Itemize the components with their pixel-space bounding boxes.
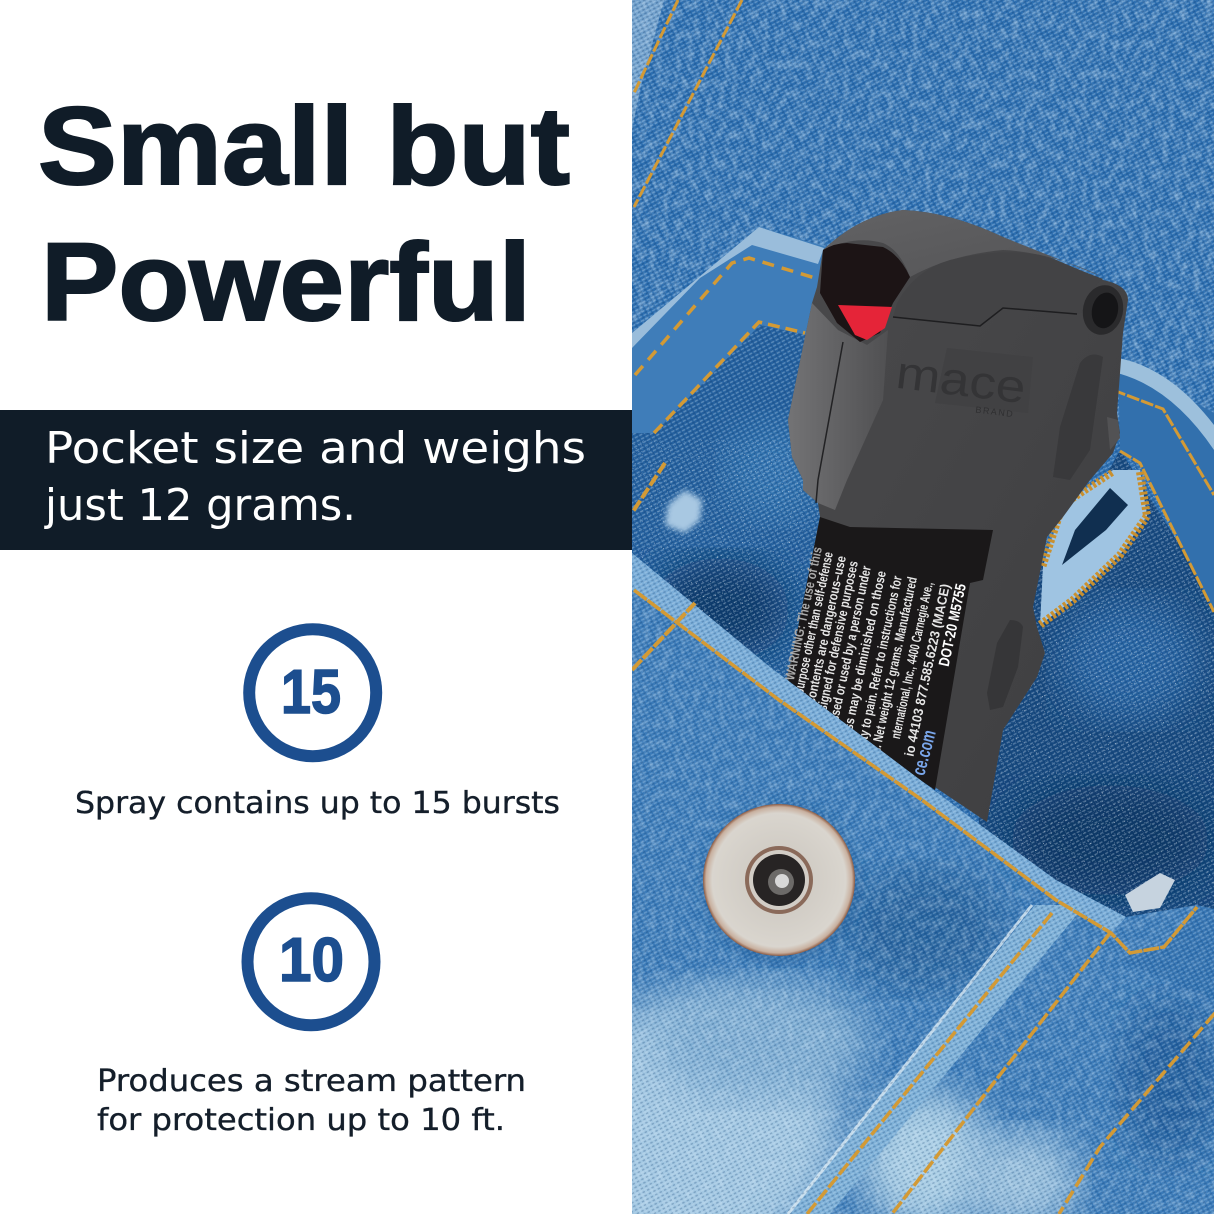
text: bursts: Spray contains up to 15 bursts	[75, 786, 560, 821]
heading: Powerful	[41, 221, 531, 344]
canister	[787, 517, 993, 790]
belt loop tear	[1040, 470, 1147, 625]
right waistband	[1113, 358, 1214, 612]
heading	[38, 85, 570, 344]
device body	[787, 210, 1128, 822]
brand panel	[935, 348, 1033, 413]
canister warning text: ivity to pain. Refer to instructions for	[853, 574, 905, 752]
banner: pocket size	[0, 410, 632, 550]
left seam stitch	[632, 463, 665, 513]
coin pocket flap	[632, 227, 830, 433]
canister warning text: WARNING: The use of this	[782, 546, 825, 682]
canister warning text: ness may be diminished on those	[838, 569, 889, 744]
canister warning text: io 44103 877.585.6223 (MACE)	[902, 583, 953, 758]
red actuator	[838, 305, 892, 340]
spray device	[782, 210, 1128, 822]
text: stream pattern	[97, 1064, 526, 1138]
icon: 15 bursts badge	[249, 629, 376, 756]
canister warning text	[782, 546, 970, 778]
canister warning text: n. Net weight 12 grams. Manufactured	[868, 576, 920, 755]
bar tack tag	[1125, 873, 1175, 912]
brand mark: mace	[893, 346, 1029, 413]
brand mark	[898, 364, 1023, 416]
canister warning text: e contents are dangerous–use	[801, 554, 849, 714]
canister warning text: ce.com	[909, 728, 941, 778]
side grip	[987, 620, 1023, 710]
icon: 10 ft badge: 10	[279, 926, 344, 995]
canister warning text: sessed or used by a person under	[824, 564, 874, 734]
heading: Small but	[38, 85, 570, 208]
torn denim at left	[665, 490, 702, 533]
text: stream pattern: Produces a stream pattern	[97, 1064, 526, 1099]
photo: denim pocket with spray	[632, 0, 1214, 1214]
nozzle opening	[820, 243, 910, 342]
canister warning text: DOT-20 M5755	[936, 582, 970, 668]
brand mark: BRAND	[975, 405, 1015, 419]
canister warning text: purpose other than self-defense	[791, 550, 836, 695]
back denim	[632, 0, 1214, 917]
icon: 15 bursts badge: 15	[281, 658, 341, 727]
upper seam stitching	[634, 0, 742, 207]
rivet button	[703, 804, 857, 960]
lanyard hole	[1082, 285, 1124, 335]
denim weave texture	[632, 554, 1214, 1214]
icon: 10 ft badge	[248, 898, 374, 1025]
thumb groove	[1053, 355, 1103, 480]
device top cap	[823, 210, 1103, 277]
device cap seam	[893, 308, 1077, 326]
banner: pocket size: just 12 grams.	[44, 480, 356, 531]
device left facet	[788, 303, 888, 510]
pocket stitching	[632, 590, 1214, 1214]
canister warning text: nternational, Inc., 4400 Carnegie Ave.,	[888, 581, 936, 740]
side nub	[1107, 417, 1120, 450]
device side seam	[816, 342, 843, 503]
canister warning text: designed for defensive purposes	[812, 560, 861, 724]
front pocket	[632, 553, 1214, 1214]
text: stream pattern: for protection up to 10 ft.	[97, 1103, 505, 1138]
device ridge	[940, 260, 1103, 280]
banner: pocket size: Pocket size and weighs	[45, 423, 586, 474]
